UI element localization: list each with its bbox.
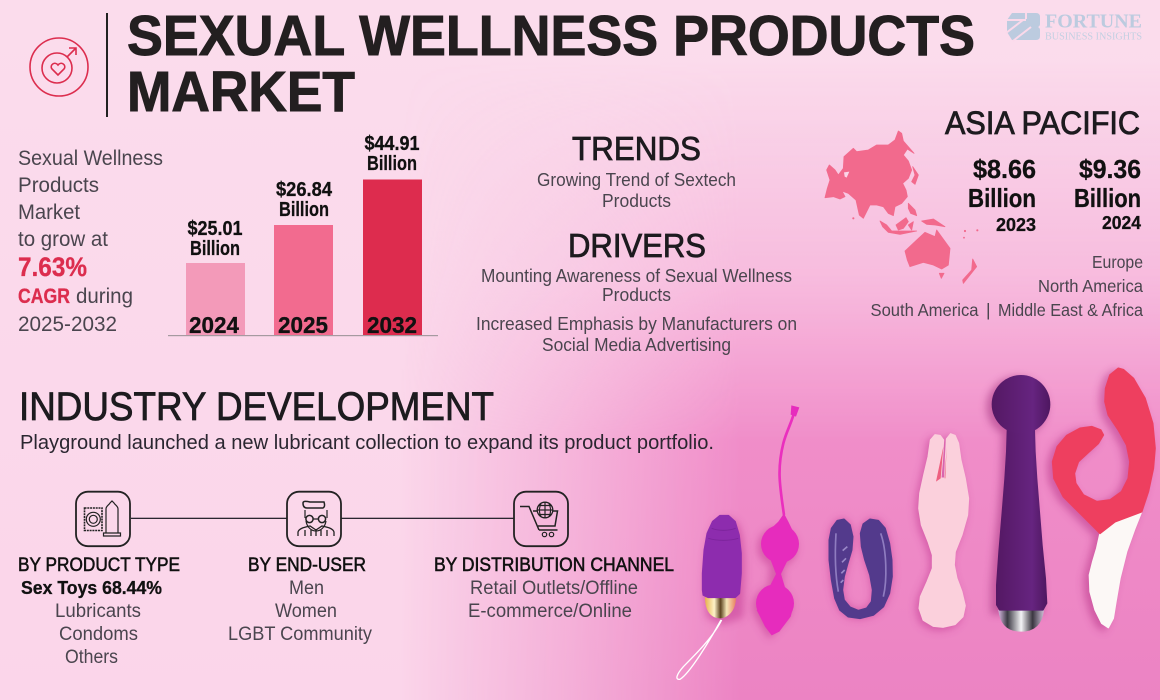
text block: other regions: North America (1038, 276, 1143, 296)
panel: drivers: Products (602, 285, 671, 305)
text block: CAGR summary: Sexual Wellness (18, 147, 163, 170)
panel: drivers: Social Media Advertising (542, 335, 731, 355)
panel: Asia Pacific figures: ASIA PACIFIC (945, 105, 1140, 141)
panel: drivers: DRIVERS (568, 227, 706, 264)
panel: Asia Pacific figures: $8.66 (973, 154, 1036, 184)
text block: CAGR summary: 7.63% (18, 252, 87, 282)
title: SEXUAL WELLNESS PRODUCTS (127, 4, 975, 68)
logo: Fortune Business Insights: BUSINESS INSIGHTS (1045, 32, 1142, 42)
text block: other regions (870, 252, 1143, 320)
bar chart: $44.91 (364, 133, 420, 155)
heading: industry development: Playground launched a new lubricant collection to expand its product portfolio. (20, 432, 714, 454)
text block: by distribution channel (434, 555, 674, 622)
text block: by product type: Others (65, 647, 118, 668)
panel: Asia Pacific figures: Billion (968, 183, 1036, 213)
toy: purple wand (986, 375, 1050, 632)
panel: Asia Pacific figures (945, 105, 1141, 235)
panel: trends: TRENDS (572, 130, 701, 167)
text block: by product type: BY PRODUCT TYPE (18, 555, 180, 576)
text block: CAGR summary: Products (18, 174, 99, 197)
bar chart: 2024 (189, 312, 239, 338)
text block: other regions: South America (870, 300, 979, 320)
title: MARKET (127, 60, 355, 124)
text block: CAGR summary (18, 147, 163, 336)
logo: Fortune Business Insights: FORTUNE (1045, 11, 1142, 33)
text block: other regions: | (986, 300, 991, 320)
text block: other regions: Europe (1092, 252, 1143, 272)
text block: CAGR summary: during (76, 285, 133, 308)
text block: by end-user: BY END-USER (248, 555, 366, 576)
text block: CAGR summary: 2025-2032 (18, 313, 117, 336)
bar chart: Billion (367, 153, 417, 175)
text block: CAGR summary: CAGR (18, 285, 70, 308)
logo: Fortune Business Insights (1006, 11, 1142, 42)
panel: Asia Pacific figures: 2023 (996, 215, 1036, 235)
panel: Asia Pacific figures: $9.36 (1079, 154, 1141, 184)
icon: end-user (287, 492, 341, 546)
text block: by product type: Condoms (59, 624, 138, 645)
text block: CAGR summary: Market (18, 201, 80, 224)
text block: other regions: Middle East & Africa (998, 300, 1143, 320)
bar chart: Billion (190, 238, 240, 260)
divider (106, 13, 108, 117)
bar chart: $25.01 (188, 218, 242, 240)
text block: by product type: Lubricants (55, 601, 141, 622)
toy: couples vibrator (829, 519, 892, 618)
panel: trends (537, 130, 736, 211)
text block: by distribution channel: Retail Outlets/Offline (470, 578, 638, 599)
text block: by end-user: Men (289, 578, 324, 599)
text block: by end-user: LGBT Community (228, 624, 372, 645)
bar chart: Billion (279, 199, 329, 221)
panel: Asia Pacific figures: Billion (1074, 183, 1141, 213)
panel: trends: Growing Trend of Sextech (537, 170, 736, 190)
heading: industry development: INDUSTRY DEVELOPMENT (19, 385, 494, 429)
panel: Asia Pacific figures: 2024 (1102, 213, 1141, 233)
bar chart: $26.84 (276, 179, 333, 201)
text block: by distribution channel: E-commerce/Online (468, 601, 632, 622)
toy: light pink massager (916, 434, 968, 630)
connector lines (131, 518, 514, 519)
toy: rabbit vibrator (1048, 368, 1155, 630)
text block: by product type: Sex Toys 68.44% (21, 577, 162, 598)
title (127, 4, 975, 124)
background (404, 104, 1160, 700)
panel: drivers: Mounting Awareness of Sexual Wellness (481, 266, 792, 286)
text block: by end-user: Women (275, 601, 337, 622)
icon: distribution channel (514, 492, 568, 546)
text block: by distribution channel: BY DISTRIBUTION CHANNEL (434, 555, 674, 576)
panel: drivers (476, 227, 797, 355)
bar chart: 2032 (367, 312, 417, 338)
icon: product type (76, 492, 130, 546)
panel: trends: Products (602, 191, 671, 211)
panel: drivers: Increased Emphasis by Manufacturers on (476, 314, 797, 334)
toy: egg vibrator (677, 516, 744, 679)
text block: CAGR summary: to grow at (18, 228, 108, 251)
text block: by end-user (228, 555, 372, 645)
heading: industry development (19, 385, 714, 454)
bar chart (168, 133, 438, 338)
map: Asia Pacific (825, 131, 978, 283)
bar chart: 2025 (278, 312, 328, 338)
text block: by product type (18, 555, 180, 668)
toy: pink balls (752, 405, 799, 639)
icon: gender and heart (30, 38, 88, 96)
